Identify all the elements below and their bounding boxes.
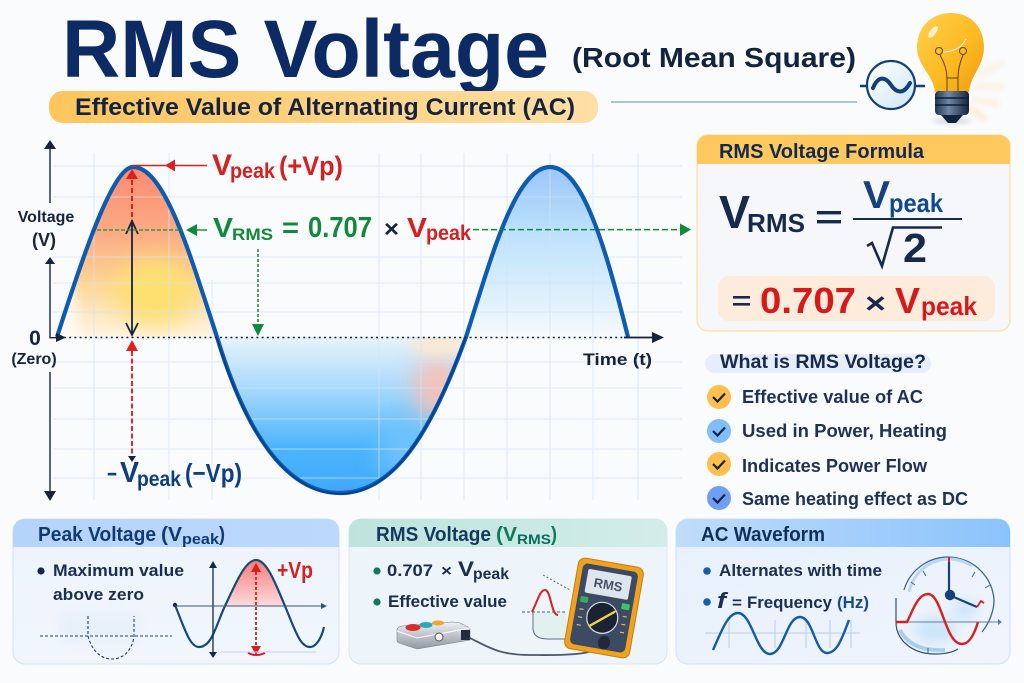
formula header: [697, 135, 1010, 164]
banner: effective value: Effective Value of Alternating Current (AC): [75, 94, 575, 121]
arrow: Vrms to zero height: [126, 221, 138, 335]
RMS header: [349, 519, 667, 547]
label: RMS equation: ×: [384, 216, 399, 243]
formula: Vrms fraction: RMS: [747, 208, 805, 238]
AC bullet text: (Hz): [837, 593, 869, 612]
AC header: [676, 519, 1010, 547]
axis label: zero: (Zero): [11, 351, 57, 368]
label: +Vp: +Vp: [277, 557, 313, 583]
axis label: zero: 0: [29, 327, 41, 350]
label: -Vpeak (-Vp): [107, 457, 242, 491]
arrow: green RMS line right: [473, 224, 691, 236]
RMS bullet text: peak: [473, 566, 509, 583]
subtitle: root mean square: (Root Mean Square): [572, 42, 856, 73]
icon: multimeter: [564, 557, 644, 659]
icon: light bulb: [917, 13, 1006, 124]
label: Vpeak (+Vp): [212, 149, 343, 183]
panel: RMS voltage: [349, 519, 667, 664]
RMS bullet text: Effective value: [388, 592, 507, 611]
cable: [470, 638, 608, 655]
peak header: [13, 519, 339, 548]
icon: control box: [397, 620, 470, 649]
formula result: ×: [865, 288, 886, 320]
formula result: 0.707: [760, 280, 856, 321]
arrow: green RMS line left: [97, 224, 207, 236]
AC bullet text: f: [717, 588, 729, 613]
AC waveform chart: [705, 613, 860, 654]
panel: RMS voltage formula: [697, 135, 1010, 331]
AC bullet text: Frequency: [747, 593, 833, 612]
peak bullet text: above zero: [53, 585, 144, 604]
label: Vpeak (+Vp): (+Vp): [279, 151, 343, 181]
RMS header: RMS Voltage: [376, 524, 491, 546]
arrow: green down to zero: [252, 249, 264, 336]
peak header: peak: [182, 531, 220, 548]
section: what is RMS voltage: [705, 352, 968, 510]
RMS header: (V: [496, 524, 518, 546]
formula result: V: [895, 280, 920, 321]
icon: multimeter: RMS: [593, 575, 624, 595]
panel: peak voltage: [13, 519, 339, 664]
axis label: voltage: (V): [32, 230, 56, 250]
label: RMS equation: 0.707: [308, 212, 372, 244]
check item 2: [707, 419, 947, 443]
peak bullet text: [37, 561, 184, 604]
peak sketch: dashed curve: [40, 612, 172, 659]
label: RMS equation: =: [282, 212, 299, 243]
RMS header: ): [551, 524, 557, 546]
axis: voltage: [44, 140, 66, 501]
arrow: red dashed to peak: [126, 169, 138, 222]
label: RMS equation: RMS: [232, 225, 273, 244]
peak bullet text: Maximum value: [53, 561, 184, 580]
label: RMS equation: V: [407, 212, 427, 243]
peak header: Peak Voltage: [38, 524, 156, 546]
panel: AC waveform: [676, 519, 1010, 664]
section: what is RMS voltage: What is RMS Voltage?: [720, 352, 926, 373]
label: RMS equation: V: [213, 212, 233, 243]
title: RMS Voltage: [62, 4, 549, 95]
peak header: ): [219, 524, 225, 546]
arrow: red dashed to negative peak: [126, 340, 138, 462]
formula: Vrms fraction: V: [719, 186, 750, 238]
check item 3: [707, 452, 928, 476]
formula result: peak: [921, 291, 978, 321]
label: -Vpeak (-Vp): (−Vp): [185, 458, 242, 488]
zero line: [64, 336, 625, 338]
label: RMS equation: peak: [426, 222, 471, 245]
AC bullet text: Alternates with time: [719, 561, 882, 580]
RMS header: RMS: [517, 531, 551, 547]
check item 4: Same heating effect as DC: [742, 489, 968, 509]
axis label: time: Time (t): [583, 350, 652, 369]
formula: Vrms fraction: [719, 174, 962, 271]
axis label: voltage: Voltage: [18, 209, 74, 226]
check item 2: Used in Power, Heating: [742, 421, 947, 441]
RMS bullet text: 0.707: [387, 561, 433, 580]
formula header: RMS Voltage Formula: [719, 141, 925, 163]
RMS bullet text: ×: [441, 563, 452, 580]
AC bullet text: [703, 561, 882, 613]
mini red wave: [522, 575, 570, 639]
peak mini chart: [173, 558, 327, 658]
AC bullet text: =: [732, 595, 742, 612]
icon: clock gauge: [896, 557, 1002, 654]
label: -Vpeak (-Vp): V: [120, 457, 140, 489]
formula: Vrms fraction: V: [863, 174, 890, 217]
callout: peak arrow: [133, 160, 207, 172]
label: -Vpeak (-Vp): −: [107, 461, 117, 488]
peak header: (V: [161, 524, 183, 546]
AC header: AC Waveform: [701, 524, 825, 546]
check item 1: Effective value of AC: [742, 387, 923, 407]
label: Vpeak (+Vp): peak: [230, 159, 275, 183]
label: Vpeak (+Vp): V: [212, 149, 232, 182]
label: RMS equation: [213, 212, 471, 245]
formula: Vrms fraction: peak: [889, 188, 943, 218]
formula: Vrms fraction: 2: [903, 225, 927, 271]
time axis arrow: [624, 332, 664, 343]
check item 1: [707, 385, 923, 409]
label: -Vpeak (-Vp): peak: [137, 467, 181, 491]
axis label: voltage: [18, 209, 74, 250]
formula result: [718, 276, 995, 321]
RMS bullet text: [373, 558, 509, 611]
icon: AC source symbol: [860, 61, 925, 109]
RMS bullet text: V: [458, 558, 474, 581]
chart: voltage sine wave: [40, 153, 682, 500]
check item 3: Indicates Power Flow: [742, 456, 928, 476]
axis label: zero: [11, 327, 57, 368]
